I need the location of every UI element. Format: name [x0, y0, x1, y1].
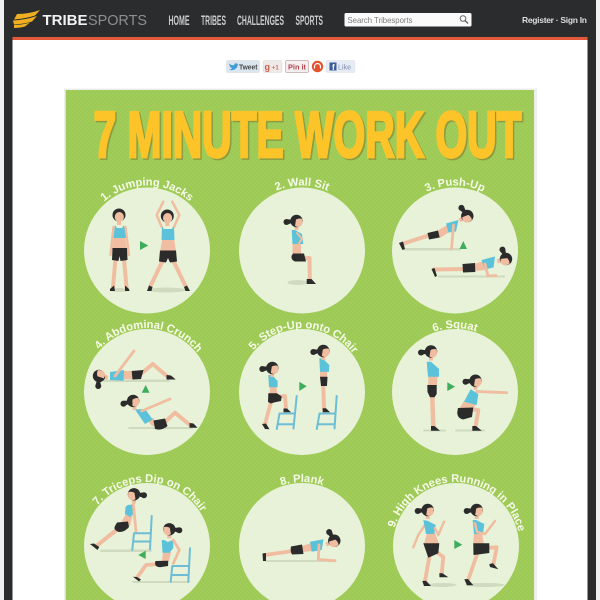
exercise 9: high knees running in place: [388, 474, 524, 600]
search box: [344, 13, 472, 26]
navigation: CHALLENGES: [237, 12, 284, 28]
like button: Like: [338, 64, 351, 72]
label: 9. High Knees Running in Place: [388, 474, 524, 531]
figure: [284, 215, 316, 285]
exercise 5: step-up onto chair: [239, 320, 365, 455]
navigation: HOME: [168, 12, 190, 28]
arrow: [447, 382, 455, 391]
figure: dip down: [132, 523, 190, 583]
chair left: [277, 396, 297, 429]
label: 4. Abdominal Crunch: [96, 320, 201, 352]
figure: step up: [259, 362, 291, 429]
google plus button: g: [264, 62, 270, 72]
arrow: [138, 551, 146, 559]
stumble icon: [312, 61, 323, 72]
chair 2: [171, 548, 190, 582]
figure: lying: [91, 351, 176, 390]
site header: [13, 10, 587, 29]
label: 6. Squat: [432, 320, 478, 332]
figure: right knee: [464, 504, 505, 587]
figure: arms bent: [432, 245, 514, 278]
exercise 2: wall sit: [239, 178, 365, 314]
google plus button: +1: [272, 64, 279, 72]
icon: tribesports logo swoosh: [13, 10, 40, 28]
label: 3. Push-Up: [424, 178, 484, 192]
arrow: [460, 241, 467, 249]
google plus button: [263, 60, 282, 72]
exercise 8: plank: [239, 474, 365, 600]
figure: squat: [455, 374, 507, 432]
like button: f: [332, 63, 335, 72]
exercise 6: squat: [392, 320, 518, 455]
account links: Register · Sign In: [522, 15, 587, 25]
label: 2. Wall Sit: [274, 178, 330, 191]
navigation: TRIBES: [201, 12, 226, 28]
figure: arms extended: [399, 202, 476, 250]
social share buttons: [226, 60, 355, 72]
exercise 7: triceps dip on chair: [84, 474, 210, 600]
arrow: [140, 241, 148, 250]
like button: [326, 60, 355, 72]
site header: SPORTS: [296, 12, 323, 28]
label: 8. Plank: [280, 474, 324, 486]
pin it button: Pin it: [288, 62, 306, 72]
navigation: [168, 12, 323, 28]
chair right: [317, 396, 337, 429]
figure: [262, 526, 343, 562]
chair: [132, 516, 152, 550]
figure: arms up: [147, 202, 190, 292]
arrow: [142, 385, 150, 393]
label: 1. Jumping Jacks: [100, 177, 192, 202]
label: 5. Step-Up onto Chair: [248, 320, 358, 352]
tweet button: Tweet: [239, 64, 258, 72]
search box: Search Tribesports: [348, 15, 412, 25]
arrow: [299, 382, 307, 391]
figure: standing: [110, 208, 130, 292]
exercise 3: push-up: [392, 178, 518, 314]
figure: left knee: [413, 504, 457, 587]
arrow: [454, 540, 462, 549]
exercise 4: abdominal crunch: [84, 320, 210, 455]
site name: SPORTS: [88, 12, 147, 29]
exercise 1: jumping jacks: [84, 177, 210, 314]
infographic panel: [64, 88, 537, 600]
site name: TRIBE: [42, 12, 88, 29]
figure: standing on chair: [310, 345, 330, 412]
figure: arms straight: [90, 488, 152, 552]
label: 7. Triceps Dip on Chair: [92, 474, 206, 510]
figure: crunch up: [119, 394, 198, 430]
site name: [42, 12, 147, 29]
figure: standing: [418, 345, 446, 432]
